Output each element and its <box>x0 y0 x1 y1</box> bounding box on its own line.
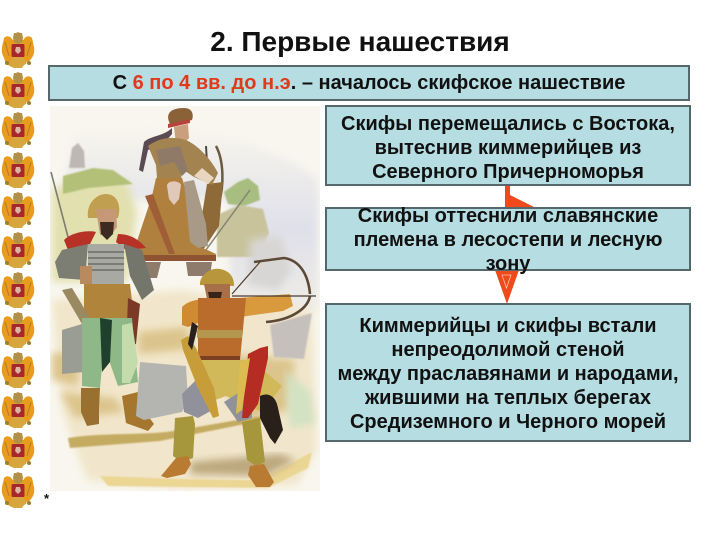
info box: Scythian movement <box>325 105 691 186</box>
standing archer <box>51 108 250 278</box>
footnote asterisk: * <box>44 491 49 506</box>
column of Russian eagle emblems <box>2 32 34 508</box>
info box: Slavic tribes pushed back <box>325 207 691 271</box>
info box: impenetrable wall: Средиземного и Черного морей <box>350 411 666 433</box>
info box: Slavic tribes pushed back: племена в лесостепи и лесную <box>354 229 662 251</box>
info box: Scythian movement: Скифы перемещались с Востока, <box>341 113 675 135</box>
left warrior <box>55 194 154 431</box>
info box: Scythian movement: Северного Причерноморья <box>372 161 644 183</box>
info box: Slavic tribes pushed back: Скифы оттеснили славянские <box>358 205 658 227</box>
subtitle banner: С 6 по 4 вв. до н.э. – началось скифское нашествие <box>113 72 625 94</box>
info box: impenetrable wall: между праславянами и народами, <box>337 363 679 385</box>
info box: Scythian movement: вытеснив киммерийцев из <box>375 137 641 159</box>
info box: impenetrable wall: непреодолимой стеной <box>391 339 625 361</box>
background landscape <box>50 106 320 491</box>
info box: impenetrable wall <box>325 303 691 442</box>
subtitle banner <box>48 65 690 101</box>
title: 2. Первые нашествия <box>210 26 510 57</box>
arrow: red connector between top boxes <box>505 186 534 207</box>
illustration: Scythian warriors <box>50 106 320 491</box>
arrow: red triangle pointing down <box>495 271 519 303</box>
info box: impenetrable wall: Киммерийцы и скифы встали <box>359 315 657 337</box>
kneeling archer <box>161 258 316 487</box>
mail shield <box>136 362 188 420</box>
info box: impenetrable wall: жившими на теплых берегах <box>365 387 651 409</box>
info box: Slavic tribes pushed back: зону <box>486 253 530 275</box>
